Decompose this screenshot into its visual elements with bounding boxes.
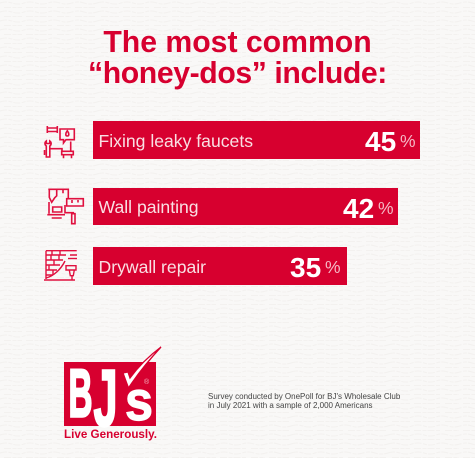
label: Wall painting: [98, 197, 199, 217]
bar: wall painting: [93, 188, 398, 225]
value: 42: [343, 193, 374, 224]
survey note: [208, 392, 400, 410]
logo registered mark: ®: [144, 378, 150, 386]
logo check mark: [123, 347, 161, 388]
label: Drywall repair: [98, 257, 206, 277]
survey note: Survey conducted by OnePoll for BJ's Wholesale Club: [208, 392, 400, 400]
logo box: [64, 362, 156, 426]
icon: wall painting: [47, 188, 84, 224]
percent sign: %: [325, 257, 341, 277]
percent sign: %: [400, 131, 416, 151]
icon: faucet and tools: [44, 126, 76, 158]
logo letter J: J: [94, 354, 118, 442]
value: 35: [290, 252, 321, 283]
title: “honey-dos” include:: [88, 57, 387, 90]
logo letter s: s: [125, 369, 153, 432]
logo: BJ's: [64, 346, 162, 442]
icon: drywall repair: [44, 250, 77, 281]
title: The most common: [103, 26, 372, 59]
percent sign: %: [378, 198, 394, 218]
tagline: Live Generously.: [64, 429, 157, 441]
logo: BJ's: B: [68, 356, 92, 432]
bar: drywall repair: [93, 247, 347, 285]
title: [88, 26, 387, 90]
bar: fixing leaky faucets: [93, 121, 420, 159]
label: Fixing leaky faucets: [98, 131, 253, 151]
value: 45: [365, 126, 396, 157]
survey note: in July 2021 with a sample of 2,000 Americans: [208, 401, 373, 410]
